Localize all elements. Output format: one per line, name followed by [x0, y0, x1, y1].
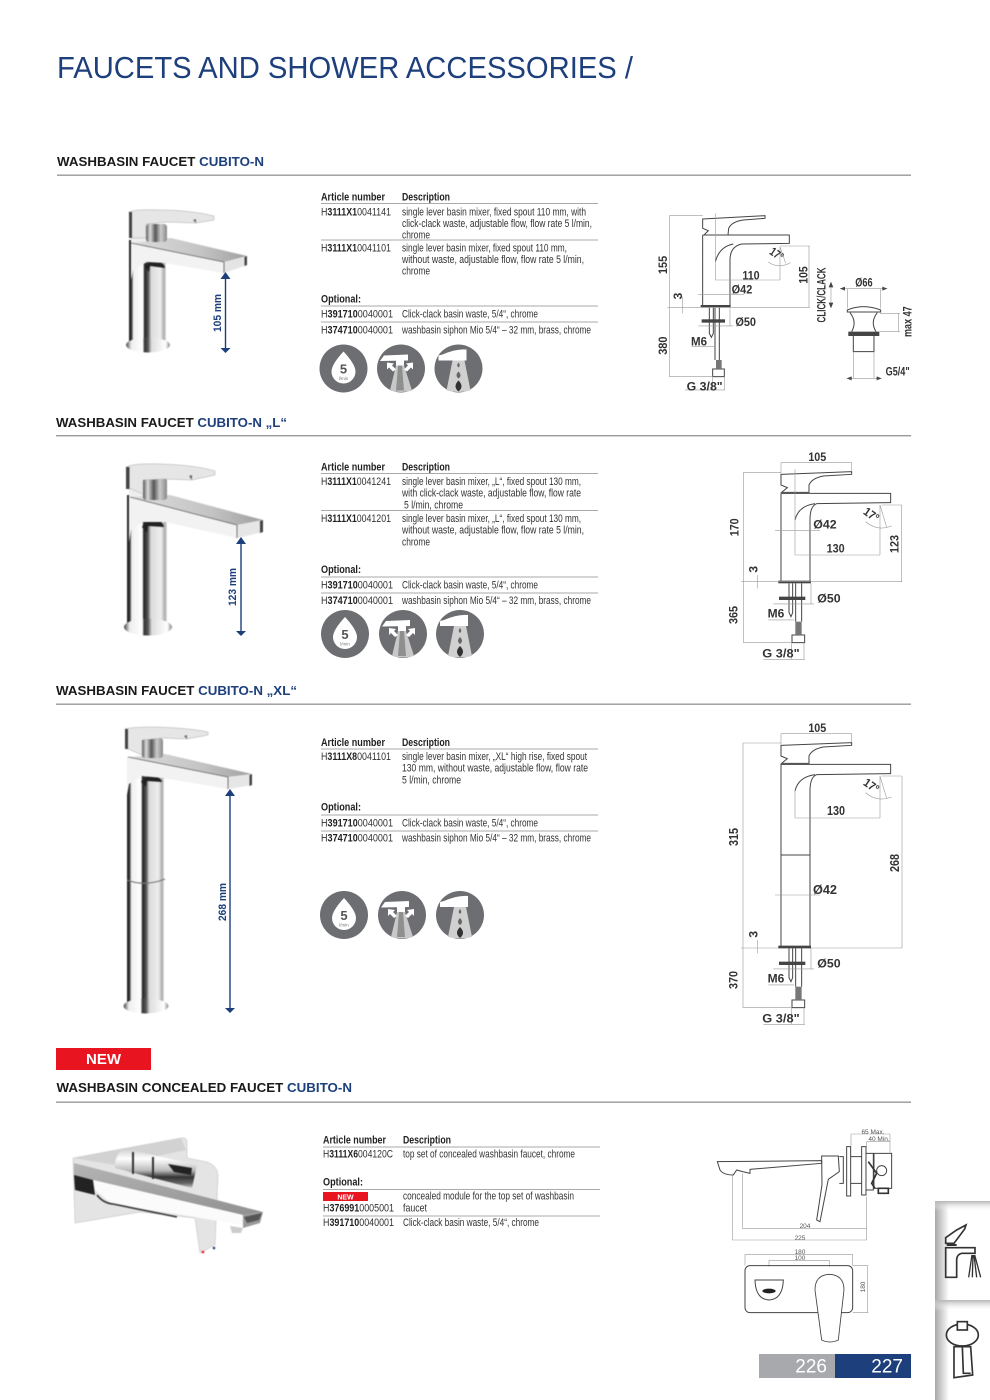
technical drawing: 315	[727, 828, 741, 846]
drawing dimension labels: 225	[795, 1235, 806, 1242]
technical drawing: G 3/8"	[762, 647, 800, 661]
article table: H3111X80041101	[321, 751, 391, 763]
technical drawing: 105	[808, 450, 827, 464]
icon: adjustable flow	[378, 891, 426, 939]
article table: H3747100040001	[321, 324, 393, 336]
icon: flow rate 5 l/min: l/min	[340, 642, 350, 646]
technical drawing: 155	[656, 256, 670, 274]
technical drawing: CLICK/CLACK	[815, 267, 829, 322]
article table	[321, 191, 598, 336]
article table: Article number	[321, 737, 386, 749]
article table: single lever basin mixer, fixed spout 110 mm,	[402, 242, 567, 254]
technical drawing: Ø66	[855, 275, 873, 289]
technical drawing: M6	[768, 607, 785, 621]
technical drawing: Ø50	[735, 315, 756, 329]
icon: adjustable flow	[379, 610, 427, 658]
article table: 5 l/min, chrome	[404, 499, 463, 511]
article table: Article number	[321, 461, 386, 473]
article table: with click-clack waste, adjustable flow, flow rate	[401, 487, 581, 499]
article table: Description	[402, 461, 450, 473]
article table: H3111X10041241	[321, 476, 391, 488]
page number 226	[759, 1354, 835, 1378]
technical drawing: M6	[768, 972, 785, 986]
article table: chrome	[402, 536, 430, 548]
article table: H3917100040001	[321, 579, 393, 591]
heading: WASHBASIN FAUCET CUBITO-N „L“	[56, 415, 287, 430]
icon: flow rate 5 l/min	[320, 344, 368, 392]
drawing dimension labels: 180	[795, 1249, 806, 1256]
article table: NEW	[337, 1194, 354, 1202]
technical drawing: G 3/8"	[687, 379, 723, 393]
technical drawing: 3	[746, 566, 760, 573]
icon: aerator drops	[436, 891, 484, 939]
section 4: washbasin concealed faucet Cubito-N	[56, 1048, 911, 1342]
technical drawing: 105	[797, 266, 811, 284]
technical drawing: Ø50	[817, 957, 841, 971]
height arrow: 105 mm	[212, 294, 224, 332]
technical drawing	[727, 721, 902, 1026]
NEW badge	[56, 1048, 151, 1070]
technical drawing	[727, 450, 902, 661]
article table: H3747100040001	[321, 595, 393, 607]
section 2: washbasin faucet Cubito-N L	[56, 415, 911, 661]
drawing dimension labels: 65 Max.	[861, 1129, 885, 1136]
drawing dimension labels: 180	[860, 1281, 867, 1292]
height arrow	[212, 272, 230, 353]
icon: flow rate 5 l/min: 5	[340, 362, 347, 376]
height arrow: 268 mm	[217, 883, 229, 921]
technical drawing: 380	[656, 336, 670, 355]
height arrow	[217, 789, 235, 1013]
article table: 130 mm, without waste, adjustable flow, flow rate	[402, 762, 588, 774]
technical drawing: 17°	[767, 244, 786, 264]
technical drawing: 365	[727, 606, 741, 624]
technical drawing: 105	[808, 721, 827, 735]
icon: flow rate 5 l/min: 5	[340, 908, 348, 923]
faucet photo	[124, 727, 252, 1014]
article table: washbasin siphon Mio 5/4“ – 32 mm, brass, chrome	[401, 324, 591, 336]
technical drawing: Ø42	[732, 282, 753, 296]
heading: WASHBASIN FAUCET CUBITO-N	[57, 154, 264, 169]
article table: Optional:	[323, 1176, 363, 1188]
technical drawing: 130	[827, 542, 845, 556]
technical drawing: Ø50	[817, 592, 841, 606]
drawing dimension labels: 40 Min.	[868, 1136, 890, 1143]
article table: 5 l/min, chrome	[402, 774, 461, 786]
section 3: washbasin faucet Cubito-N XL	[56, 683, 911, 1026]
page number 227: 227	[871, 1356, 903, 1378]
technical drawing: 3	[746, 931, 760, 938]
article table: H3111X10041201	[321, 513, 391, 525]
faucet photo	[126, 210, 247, 352]
article table: Click-clack basin waste, 5/4“, chrome	[402, 579, 538, 591]
technical drawing: 268	[888, 854, 902, 872]
icon: flow rate 5 l/min: l/min	[339, 922, 349, 928]
technical drawing: Ø42	[813, 883, 837, 897]
drawing dimension labels: 100	[795, 1255, 806, 1262]
technical drawing	[656, 213, 914, 393]
article table: click-clack waste, adjustable flow, flow rate 5 l/min,	[402, 218, 592, 230]
concealed faucet photo	[73, 1138, 263, 1253]
article table: Optional:	[321, 293, 361, 305]
article table: top set of concealed washbasin faucet, chrome	[403, 1148, 575, 1160]
technical drawing: Ø42	[813, 518, 837, 532]
heading: WASHBASIN FAUCET CUBITO-N „XL“	[56, 683, 297, 698]
technical drawing: 17°	[861, 504, 882, 525]
article table: H3111X10041101	[321, 242, 391, 254]
article table: H3111X10041141	[321, 206, 391, 218]
article table: H3917100040001	[321, 817, 393, 829]
article table: H3917100040001	[323, 1217, 394, 1229]
technical drawing: M6	[691, 334, 707, 348]
height arrow	[227, 537, 246, 636]
icon: aerator drops	[434, 344, 482, 392]
page number 227	[835, 1354, 911, 1378]
article table	[321, 461, 598, 607]
title: FAUCETS AND SHOWER ACCESSORIES /	[57, 50, 633, 85]
article table: Click-clack basin waste, 5/4“, chrome	[403, 1217, 539, 1229]
article table	[323, 1134, 600, 1229]
technical drawing: 110	[742, 268, 760, 282]
article table: concealed module for the top set of washbasin	[403, 1190, 574, 1202]
article table: single lever basin mixer, fixed spout 110 mm, with	[402, 206, 586, 218]
article table: chrome	[402, 265, 430, 277]
article table: Click-clack basin waste, 5/4“, chrome	[402, 308, 538, 320]
icon: aerator drops	[436, 610, 484, 658]
icon: flow rate 5 l/min: l/min	[339, 376, 349, 381]
article table: H3769910005001	[323, 1202, 394, 1214]
article table: without waste, adjustable flow, flow rate 5 l/min,	[401, 254, 584, 266]
article table: washbasin siphon Mio 5/4“ – 32 mm, brass, chrome	[401, 595, 591, 607]
article table: H3111X6004120C	[323, 1148, 393, 1160]
article table: single lever basin mixer, „XL“ high rise, fixed spout	[402, 751, 587, 763]
section 1: washbasin faucet Cubito-N	[57, 154, 914, 393]
technical drawing: 123	[888, 535, 902, 553]
article table: H3917100040001	[321, 308, 393, 320]
article table: Click-clack basin waste, 5/4“, chrome	[402, 817, 538, 829]
article table: single lever basin mixer, „L“, fixed spout 130 mm,	[402, 513, 581, 525]
technical drawing: 170	[727, 518, 741, 536]
article table: H3747100040001	[321, 832, 393, 844]
icon: flow rate 5 l/min: 5	[341, 627, 349, 642]
article table: Description	[402, 737, 450, 749]
drawing dimension labels	[795, 1129, 890, 1292]
article table: chrome	[402, 229, 430, 241]
article table: washbasin siphon Mio 5/4“ – 32 mm, brass, chrome	[401, 832, 591, 844]
technical drawing: G5/4"	[886, 365, 910, 379]
technical drawing: G 3/8"	[762, 1012, 800, 1026]
side tab: accessories category	[935, 1300, 990, 1400]
drawing dimension labels: 204	[800, 1223, 811, 1230]
heading: WASHBASIN CONCEALED FAUCET CUBITO-N	[56, 1080, 352, 1095]
article table: Description	[402, 191, 450, 203]
height arrow: 123 mm	[227, 568, 239, 606]
icon: flow rate 5 l/min	[320, 891, 368, 939]
article table: Optional:	[321, 801, 361, 813]
article table: Article number	[323, 1134, 387, 1146]
article table: single lever basin mixer, „L“, fixed spout 130 mm,	[402, 476, 581, 488]
article table: Optional:	[321, 564, 361, 576]
article table: Article number	[321, 191, 386, 203]
article table	[321, 737, 598, 844]
technical drawing: max 47	[900, 306, 914, 337]
side tab: faucet category	[935, 1201, 990, 1300]
technical drawing	[717, 1134, 892, 1342]
article table: without waste, adjustable flow, flow rate 5 l/min,	[401, 524, 584, 536]
icon: flow rate 5 l/min	[321, 610, 369, 658]
technical drawing: 130	[827, 804, 845, 818]
technical drawing: 370	[727, 971, 741, 989]
page number 226: 226	[795, 1356, 827, 1378]
faucet photo	[124, 464, 263, 636]
NEW badge: NEW	[86, 1051, 122, 1068]
technical drawing: 17°	[861, 775, 882, 796]
article table: faucet	[403, 1202, 427, 1214]
icon: adjustable flow	[377, 344, 425, 392]
article table: Description	[403, 1134, 451, 1146]
technical drawing: 3	[671, 292, 685, 299]
